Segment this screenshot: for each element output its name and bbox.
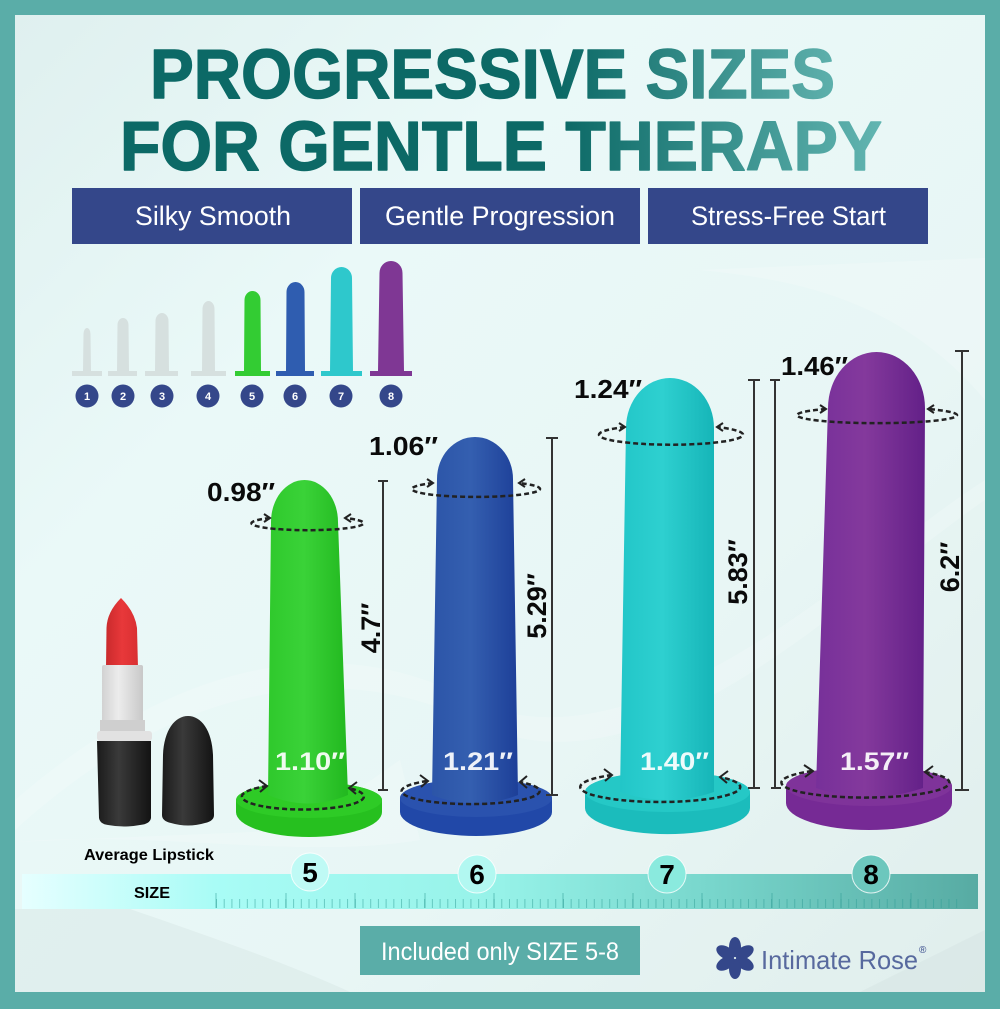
size ruler: 8 — [863, 859, 879, 890]
included sizes note: Included only SIZE 5-8 — [381, 938, 619, 966]
size ruler: 5 — [302, 857, 318, 888]
size ruler — [22, 853, 978, 909]
title — [120, 35, 882, 185]
size lineup icons — [72, 261, 412, 408]
size ruler: SIZE — [134, 885, 170, 902]
logo: Intimate Rose — [714, 937, 927, 979]
size ruler: 6 — [469, 859, 485, 890]
circumference markers — [242, 409, 957, 810]
logo: Intimate Rose: Intimate Rose — [761, 945, 918, 975]
title: FOR GENTLE THERAPY — [120, 107, 882, 185]
base diameter labels: 1.21″ — [443, 748, 513, 776]
dilator size 7 — [585, 378, 750, 834]
top diameter labels: 0.98″ — [207, 477, 275, 507]
title: PROGRESSIVE SIZES — [150, 35, 835, 113]
arrowheads — [259, 405, 934, 794]
dilator size 6 — [400, 437, 552, 836]
top diameter labels: 1.06″ — [369, 431, 438, 461]
benefit banners: Gentle Progression — [385, 201, 615, 231]
benefit banners — [72, 188, 928, 244]
height labels: 5.83″ — [723, 539, 753, 605]
benefit banners: Stress-Free Start — [691, 201, 886, 231]
height labels: 5.29″ — [522, 573, 552, 639]
size lineup icons: 3 — [159, 391, 165, 403]
logo: Intimate Rose: ® — [919, 945, 927, 956]
dilator size 8 — [786, 352, 952, 830]
dilator size 5 — [236, 480, 382, 837]
top diameter labels — [207, 351, 848, 507]
base diameter labels: 1.57″ — [840, 748, 909, 776]
size lineup icons: 7 — [338, 391, 344, 403]
benefit banners: Silky Smooth — [135, 201, 291, 231]
lipstick — [97, 598, 214, 826]
top diameter labels: 1.46″ — [781, 351, 848, 381]
base diameter labels: 1.40″ — [640, 748, 709, 776]
lipstick label: Average Lipstick — [84, 847, 214, 864]
base diameter labels — [275, 748, 909, 776]
size lineup icons: 1 — [84, 391, 90, 403]
height labels: 6.2″ — [935, 542, 965, 592]
included sizes note — [360, 926, 640, 975]
base diameter labels: 1.10″ — [275, 748, 345, 776]
height labels — [356, 539, 965, 653]
height dimension lines — [378, 351, 969, 795]
height labels: 4.7″ — [356, 603, 386, 653]
size lineup icons: 6 — [292, 391, 298, 403]
size lineup icons: 2 — [120, 391, 126, 403]
size lineup icons: 5 — [249, 391, 255, 403]
top diameter labels: 1.24″ — [574, 374, 642, 404]
size ruler: 7 — [659, 859, 675, 890]
size lineup icons: 4 — [205, 391, 212, 403]
size lineup icons: 8 — [388, 391, 394, 403]
